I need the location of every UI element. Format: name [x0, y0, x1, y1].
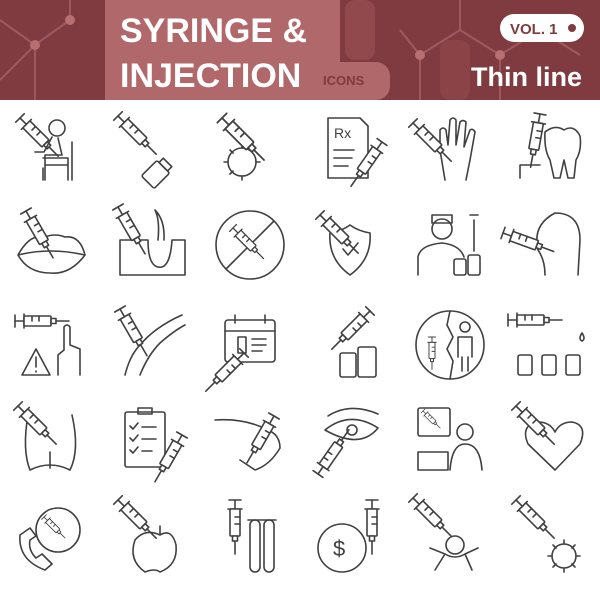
- header banner: [0, 0, 600, 100]
- icon: eye injection: [312, 408, 378, 478]
- icon: phone bubble: [20, 508, 80, 570]
- icon: hair follicle: [112, 204, 185, 275]
- icon: hand injection: [215, 412, 280, 470]
- icon: clipboard checklist: [125, 408, 188, 485]
- icon: virus syringe: [511, 495, 580, 572]
- icon: buttocks: [13, 401, 76, 470]
- icon: shield syringe: [315, 210, 370, 275]
- icon: warning finger: [15, 314, 80, 375]
- icon: syringe vial: [113, 111, 174, 189]
- icon: vials drop: [508, 313, 584, 375]
- icon: patient in chair: [15, 113, 72, 180]
- icon: no injection: [216, 211, 284, 279]
- badge: vol 1: [500, 14, 584, 42]
- icon: heart: [511, 401, 583, 470]
- icon: dollar coin syringe: [318, 500, 379, 572]
- icon: calendar: [201, 315, 275, 396]
- label: thin line: Thin line: [471, 62, 582, 92]
- subtitle: icons: ICONS: [323, 73, 364, 88]
- badge: vol 1: VOL. 1: [510, 21, 558, 38]
- title: INJECTION: [120, 57, 301, 95]
- icon: dollar coin syringe: $: [333, 536, 345, 561]
- icon: split circle person: [416, 311, 484, 379]
- title: SYRINGE &: [120, 12, 307, 50]
- title: [120, 12, 307, 95]
- icon: telemedicine: [418, 408, 482, 470]
- icon: lips: [18, 208, 85, 273]
- icon: syringe test tubes: [228, 500, 276, 572]
- icon: legs: [114, 306, 185, 375]
- icon: face injection: [501, 213, 580, 275]
- icon: syringe virus: [217, 113, 269, 180]
- icon: rx prescription: Rx: [334, 125, 351, 141]
- icon: syringe tooth: [520, 113, 580, 178]
- icon: baby: [408, 493, 478, 570]
- icon: doctor: [418, 215, 480, 275]
- icon: apple: [113, 495, 176, 572]
- icon: syringe vials: [327, 306, 376, 377]
- icon: syringe hand: [408, 118, 475, 180]
- icon: rx prescription: [328, 118, 388, 190]
